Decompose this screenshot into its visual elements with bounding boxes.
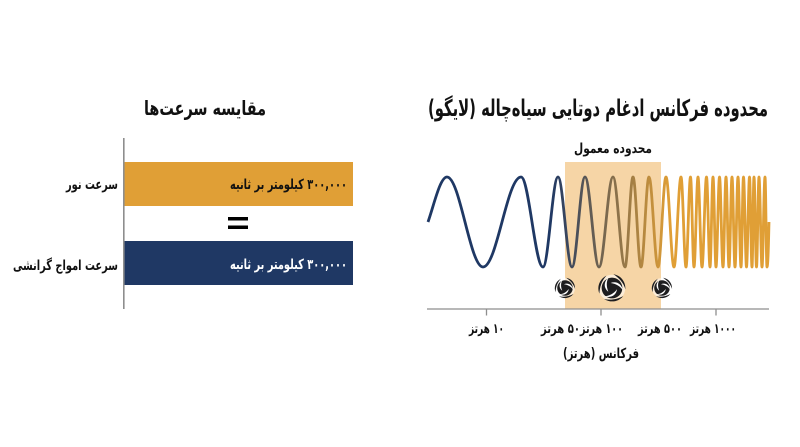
tick label: 500 Hz: ۵۰۰ هرتز — [637, 321, 682, 337]
bar: gravitational wave speed — [124, 241, 353, 285]
tick label: 10 Hz: ۱۰ هرتز — [468, 321, 504, 337]
equals sign — [228, 217, 248, 229]
icon: black hole right — [648, 278, 672, 302]
panel: black hole merger frequency range — [427, 95, 769, 362]
tick label: 1000 Hz: ۱۰۰۰ هرتز — [689, 321, 736, 337]
frequency axis — [427, 309, 769, 316]
tick label: 100 Hz: ۱۰۰ هرتز — [579, 321, 623, 337]
value: gravitational wave speed: ۳۰۰,۰۰۰ کیلومتر بر ثانیه — [230, 257, 347, 273]
label: typical range: محدوده معمول — [574, 141, 652, 157]
tick label: 50 Hz: ۵۰ هرتز — [540, 321, 580, 337]
chirp waveform — [428, 177, 769, 267]
label: speed of light: سرعت نور — [65, 177, 118, 193]
typical range band — [565, 162, 661, 309]
bar: speed of light — [124, 162, 353, 206]
panel: speed comparison — [13, 96, 353, 309]
axis title: frequency (Hz): فرکانس (هرتز) — [563, 346, 639, 362]
value: speed of light: ۳۰۰,۰۰۰ کیلومتر بر ثانیه — [230, 177, 347, 193]
heading: speed comparison: مقایسه سرعت‌ها — [144, 96, 266, 120]
vertical axis line — [123, 138, 125, 309]
icon: black hole left — [551, 278, 575, 302]
icon: black hole center — [593, 274, 625, 307]
label: gravitational wave speed: سرعت امواج گرانشی — [13, 257, 118, 274]
